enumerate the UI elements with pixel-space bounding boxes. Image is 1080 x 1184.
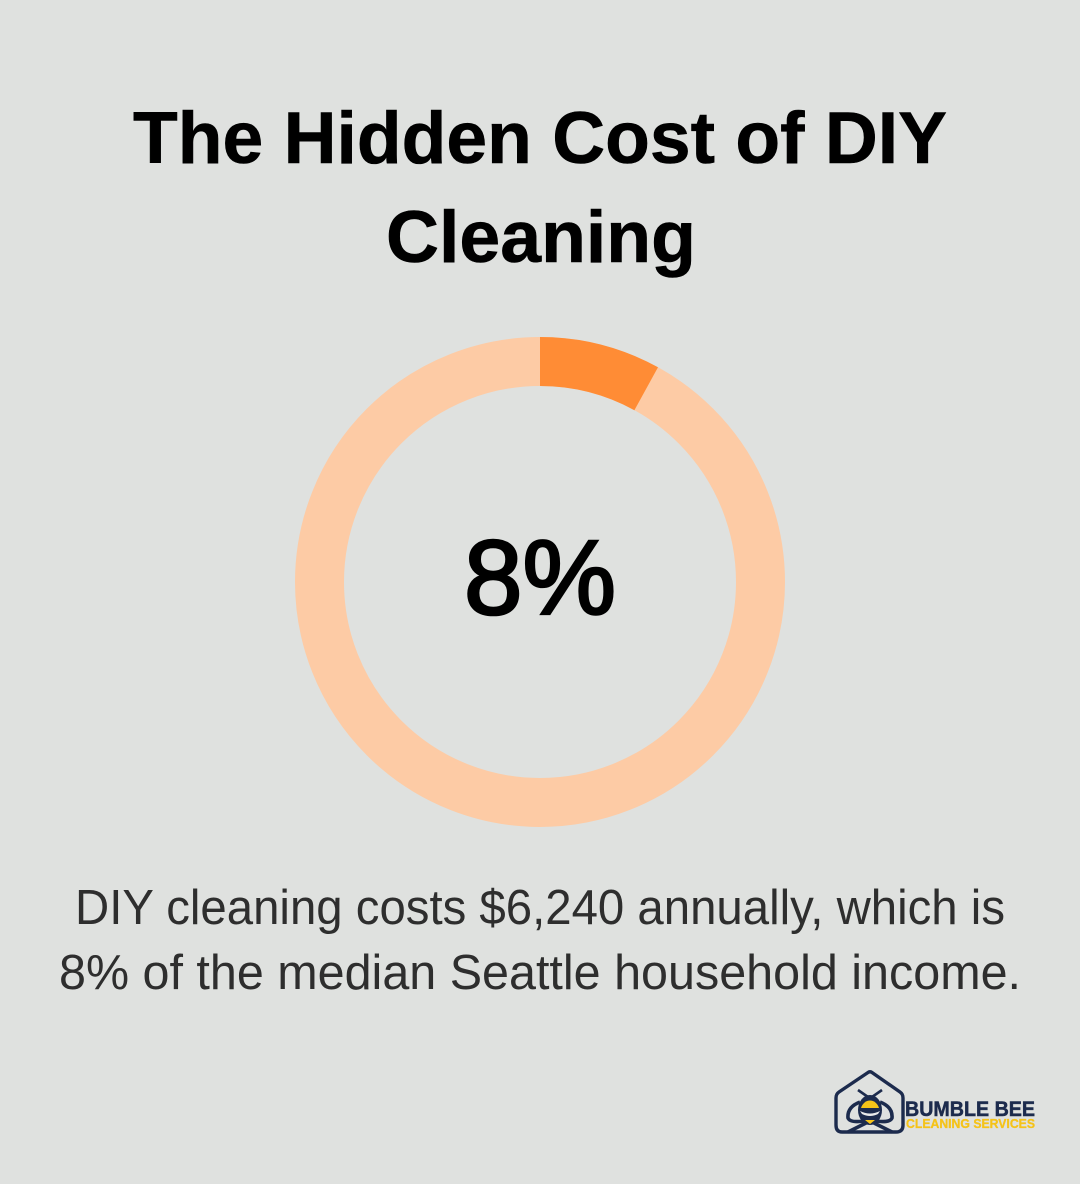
title: The Hidden Cost of DIY xyxy=(133,98,947,179)
logo wordmark: BUMBLE BEE xyxy=(905,1098,1035,1121)
icon: house with bee xyxy=(836,1072,903,1132)
description text: DIY cleaning costs $6,240 annually, which is xyxy=(75,881,1005,935)
logo tagline: CLEANING SERVICES xyxy=(906,1117,1035,1131)
description text: 8% of the median Seattle household income. xyxy=(59,946,1021,1000)
title: Cleaning xyxy=(386,197,696,278)
bee antennae xyxy=(858,1090,882,1097)
donut track xyxy=(320,362,760,802)
bee wings xyxy=(848,1102,892,1132)
logo: Bumble Bee Cleaning Services xyxy=(836,1072,1035,1132)
title xyxy=(133,98,947,278)
donut chart: 8 percent xyxy=(320,337,760,802)
bee body xyxy=(858,1095,882,1125)
description text xyxy=(59,881,1021,1000)
house outline xyxy=(836,1072,903,1132)
donut highlighted segment xyxy=(540,337,658,410)
donut centre value: 8% xyxy=(464,519,616,637)
